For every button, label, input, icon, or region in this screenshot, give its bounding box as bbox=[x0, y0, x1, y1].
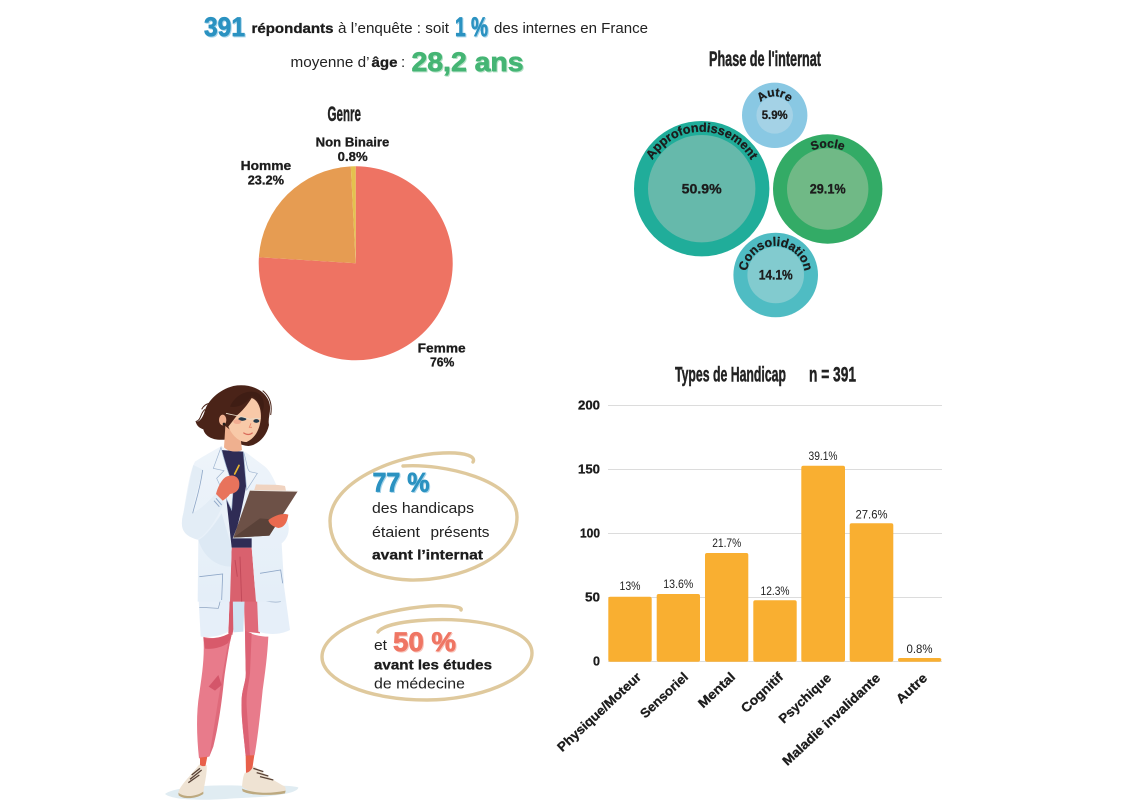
y axis labels: 200 bbox=[578, 398, 600, 412]
y axis labels: 100 bbox=[580, 526, 600, 540]
x axis labels: Psychique bbox=[776, 670, 834, 726]
value labels: 21.7% bbox=[712, 538, 741, 550]
x axis labels bbox=[554, 669, 930, 768]
value labels: 13% bbox=[620, 581, 640, 593]
callout: 77 % avant l'internat: étaient bbox=[372, 524, 421, 541]
header: average age: moyenne d’ bbox=[290, 54, 370, 71]
x axis labels: Cognitif bbox=[738, 669, 787, 716]
header: average age bbox=[290, 47, 524, 77]
value labels bbox=[620, 451, 932, 656]
header: average age: 28,2 ans bbox=[412, 47, 524, 77]
hand-drawn circle bbox=[322, 606, 532, 700]
pie label: Non Binaire: Non Binaire bbox=[316, 135, 389, 150]
header: respondents line: à l’enquête : soit bbox=[338, 20, 450, 37]
callout: 77 % avant l'internat: 77 % bbox=[372, 468, 430, 498]
y axis labels: 0 bbox=[593, 654, 600, 668]
callout: 50 % avant les études: de médecine bbox=[374, 676, 465, 692]
y axis labels: 150 bbox=[578, 462, 600, 476]
callout: 50 % avant les études: avant les études bbox=[374, 656, 492, 672]
value labels: 12.3% bbox=[760, 586, 790, 598]
bubble: Autre: 5.9% bbox=[762, 108, 788, 122]
header: average age: âge bbox=[372, 54, 398, 70]
header: respondents line bbox=[204, 12, 648, 42]
bubble: Socle bbox=[773, 134, 882, 244]
y axis labels bbox=[578, 398, 600, 668]
value labels: 0.8% bbox=[906, 644, 932, 656]
bubble: Socle: Socle bbox=[810, 139, 844, 150]
bubble: Socle: 29.1% bbox=[810, 180, 846, 196]
bubble: Approfondissement bbox=[634, 121, 770, 256]
pie label: Femme bbox=[418, 340, 466, 370]
hand-drawn circle bbox=[330, 453, 517, 580]
heading: Genre: Genre bbox=[328, 103, 361, 126]
bubble: Approfondissement: 50.9% bbox=[682, 180, 722, 196]
pie chart: genre bbox=[241, 135, 466, 370]
callout: 77 % avant l'internat: des handicaps bbox=[372, 500, 474, 517]
callout: 77 % avant l'internat: avant l’internat bbox=[372, 546, 483, 562]
callout: 50 % avant les études: 50 % bbox=[393, 627, 456, 657]
upper body and head bbox=[182, 385, 298, 602]
x axis labels: Maladie invalidante bbox=[779, 670, 883, 768]
bar chart: types de handicap bbox=[554, 398, 942, 768]
x axis labels: Autre bbox=[893, 670, 930, 706]
pie label: Homme bbox=[241, 158, 291, 187]
header: average age: : bbox=[401, 54, 405, 71]
header: respondents line: des internes en France bbox=[494, 20, 648, 37]
bubble: Approfondissement: Approfondissement bbox=[647, 122, 758, 160]
pie label: Femme: Femme bbox=[418, 340, 466, 355]
bubble chart: phase de l'internat bbox=[634, 82, 882, 318]
lab coat, lower panels bbox=[198, 588, 290, 637]
value labels: 13.6% bbox=[663, 579, 693, 591]
illustration: female doctor bbox=[165, 385, 298, 800]
callout: 50 % avant les études: et bbox=[374, 637, 388, 654]
value labels: 39.1% bbox=[808, 451, 838, 463]
x axis labels: Mental bbox=[695, 669, 738, 711]
heading: Types de Handicap: Types de Handicap bbox=[675, 364, 786, 386]
bubble: Consolidation: Consolidation bbox=[739, 236, 811, 271]
header: respondents line: répondants bbox=[252, 20, 334, 36]
callout: 77 % avant l'internat: présents bbox=[430, 524, 490, 541]
bars bbox=[608, 466, 941, 662]
heading: Phase de l'internat: Phase de l'internat bbox=[709, 48, 821, 71]
pie label: Homme: 23.2% bbox=[248, 172, 284, 187]
callout: 77 % avant l'internat bbox=[330, 453, 517, 580]
header: respondents line: 1 % bbox=[455, 12, 488, 42]
bubble: Autre bbox=[742, 82, 808, 148]
bubble: Consolidation bbox=[733, 232, 818, 318]
legs and shoes bbox=[165, 588, 298, 800]
callout: 50 % avant les études bbox=[322, 606, 532, 700]
x axis labels: Sensoriel bbox=[637, 669, 691, 721]
pie label: Femme: 76% bbox=[430, 355, 455, 370]
pie label: Homme: Homme bbox=[241, 158, 291, 173]
x axis labels: Physique/Moteur bbox=[554, 669, 644, 755]
value labels: 27.6% bbox=[856, 510, 888, 522]
bubble: Autre: Autre bbox=[758, 88, 792, 102]
pie label: Non Binaire bbox=[316, 135, 389, 164]
heading: Types de Handicap: n = 391 bbox=[809, 364, 856, 386]
pie label: Non Binaire: 0.8% bbox=[338, 149, 368, 164]
bubble: Consolidation: 14.1% bbox=[759, 266, 793, 282]
header: respondents line: 391 bbox=[204, 12, 245, 42]
y axis labels: 50 bbox=[585, 590, 600, 604]
